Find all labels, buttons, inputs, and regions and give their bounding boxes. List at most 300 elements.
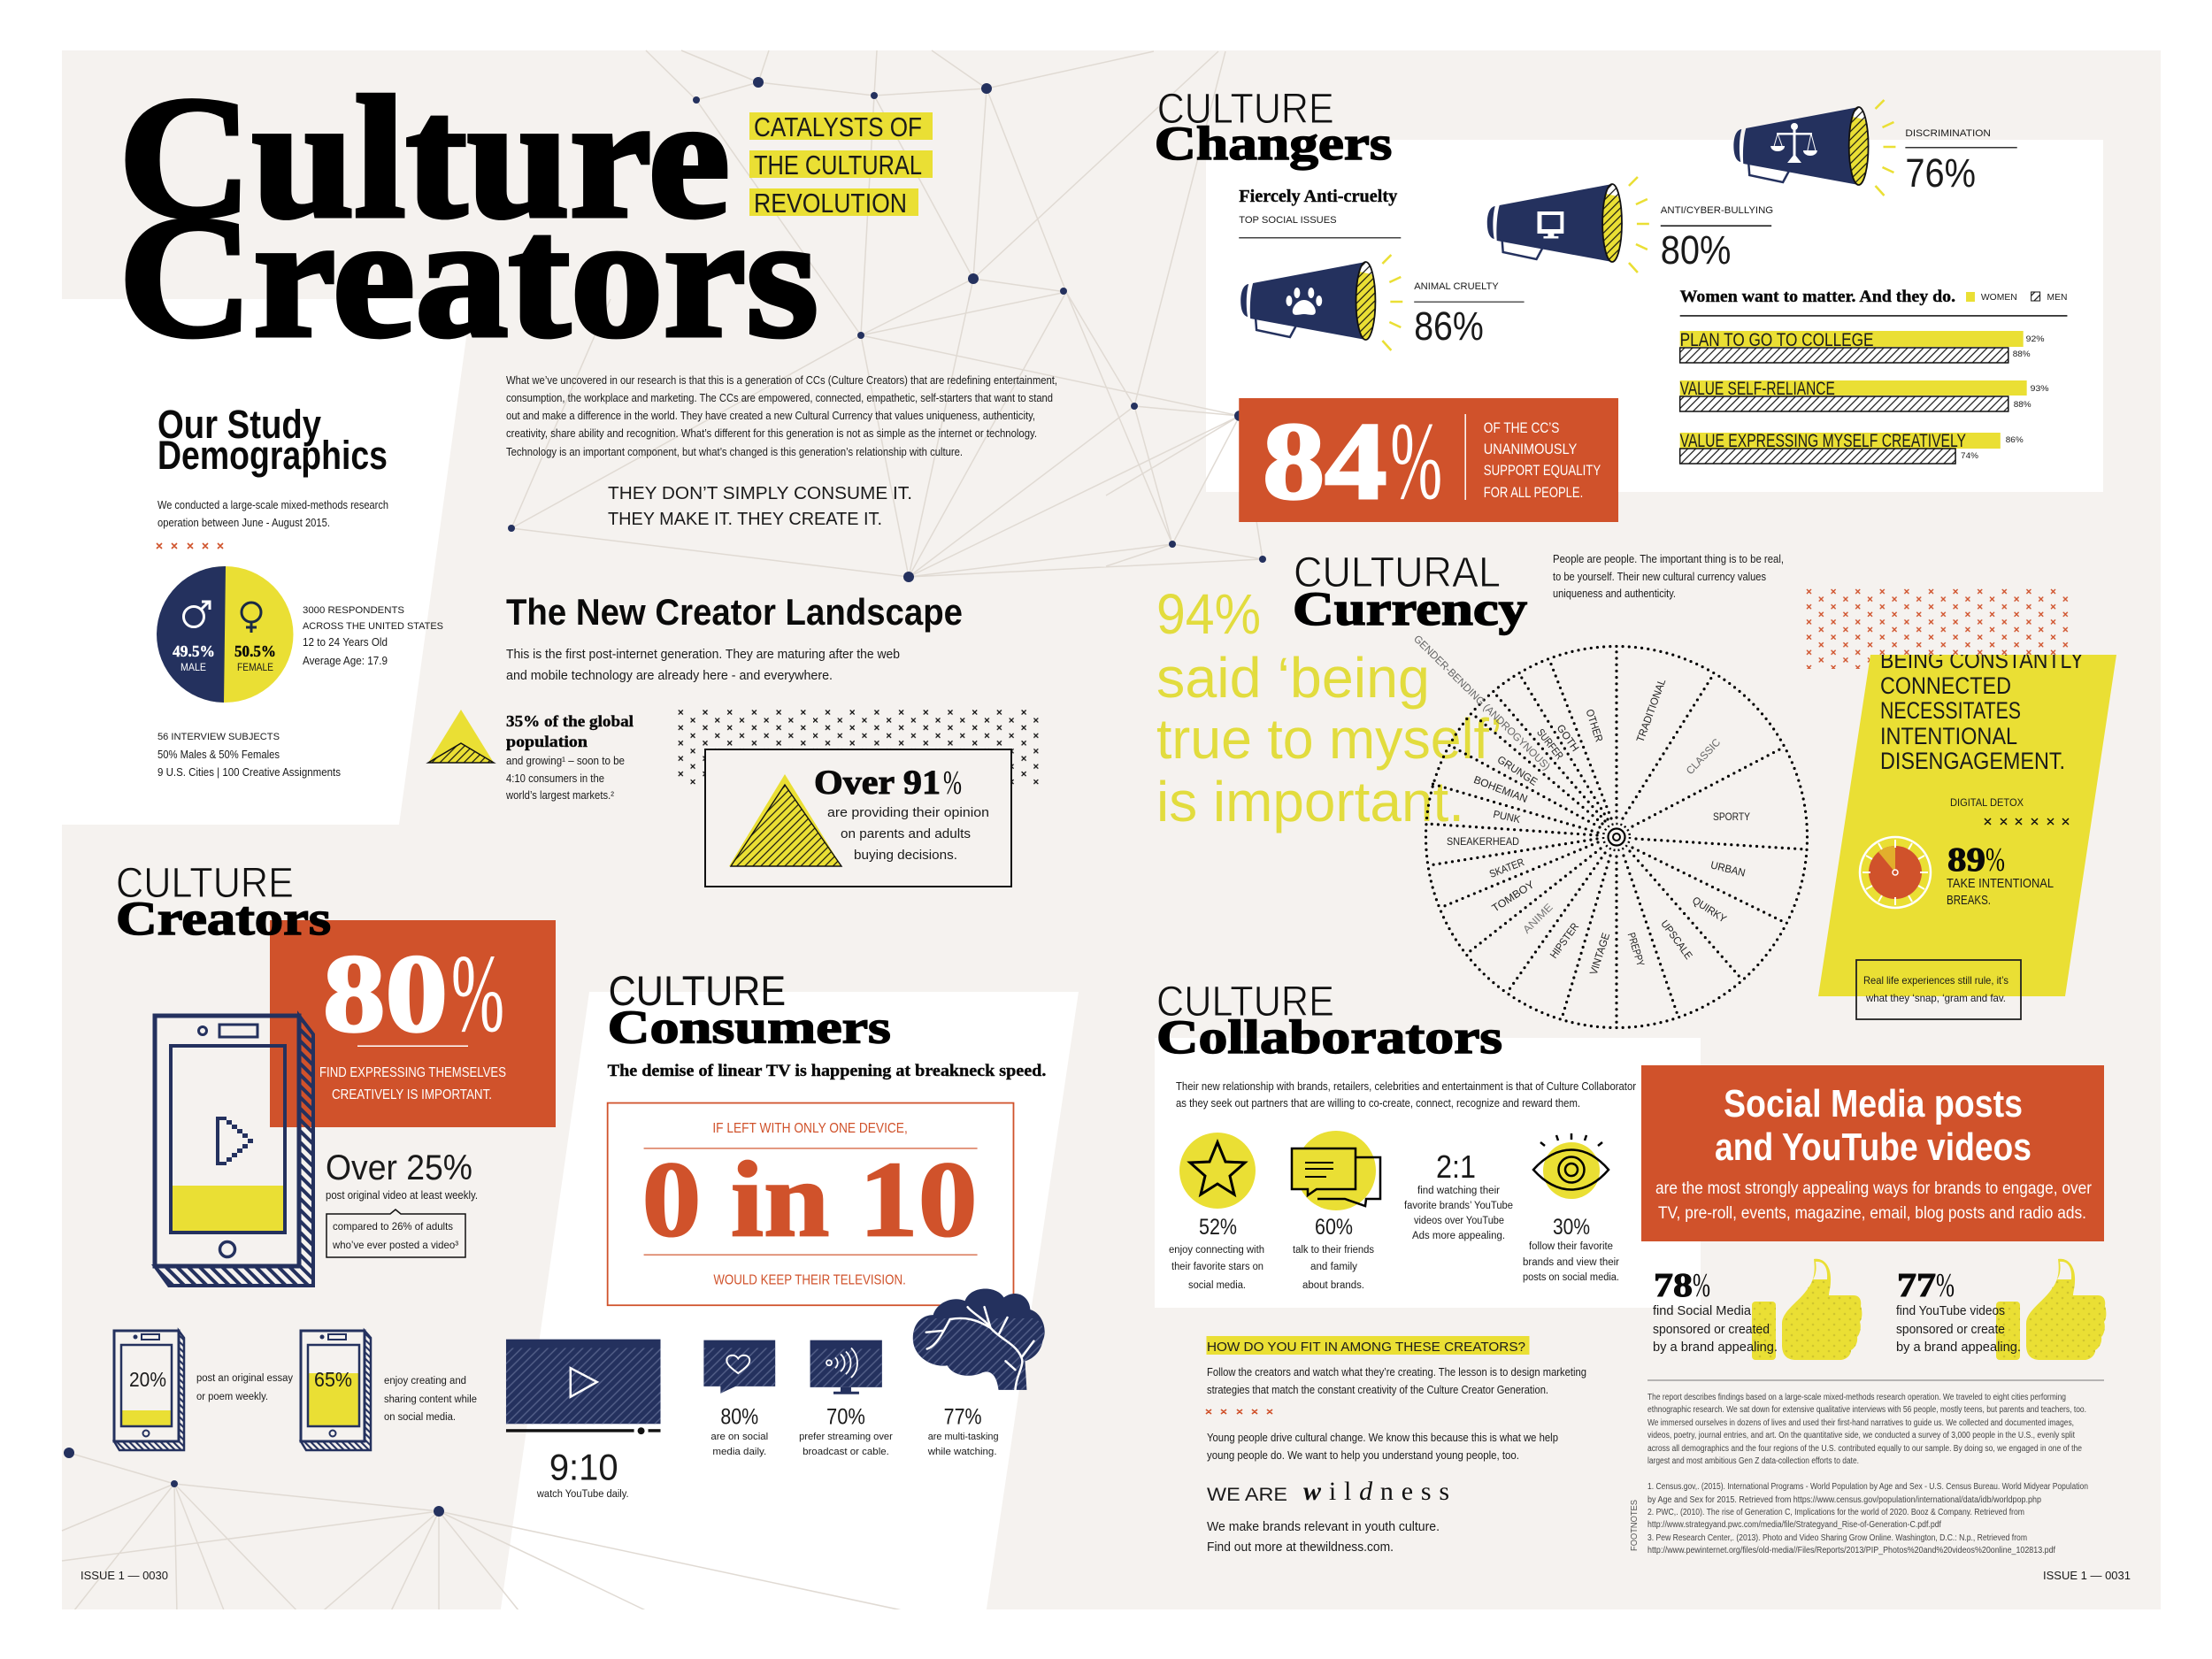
wheel labels xyxy=(1411,633,1750,976)
report description: largest and most ambitious Gen Z data-collection efforts to date. xyxy=(1647,1456,1859,1466)
text: post an original essay: or poem weekly. xyxy=(196,1392,268,1402)
wheel labels: CLASSIC xyxy=(1684,736,1723,777)
stat: 77 percent multitasking xyxy=(927,1405,999,1457)
icon: thumbs up 77 percent xyxy=(1996,1259,2106,1360)
text: follow the creators xyxy=(1207,1366,1586,1396)
wheel labels: TRADITIONAL xyxy=(1634,677,1669,744)
footnotes: 3. Pew Research Center,. (2013). Photo and Video Sharing Grow Online. Washington, D.C.: N.p., Retrieved from xyxy=(1647,1533,2027,1543)
text: post an original essay xyxy=(196,1373,293,1402)
stat: 35 percent global population: 4:10 consumers in the xyxy=(506,772,604,785)
pie chart: gender split: 50.5% xyxy=(234,642,276,660)
intro paragraph: creativity, share ability and recognition. What’s different for this generation is not as simple as the internet or technology. xyxy=(506,426,1037,440)
callout: 84 percent: UNANIMOUSLY xyxy=(1484,441,1577,457)
callout: social media posts: Social Media posts xyxy=(1724,1082,2023,1125)
demographics description xyxy=(157,498,388,529)
chart: style wheel xyxy=(1411,633,1807,1028)
callout: 80 percent: FIND EXPRESSING THEMSELVES xyxy=(319,1065,506,1080)
bars: value expressing myself creatively: 74% xyxy=(1961,451,1979,461)
callout: over 91 percent: Over 91 xyxy=(814,764,941,802)
panel: culture changers white xyxy=(1206,140,2103,492)
report description: ethnographic research. We sat down for extensive qualitative interviews with 56 people, mostly teens, but parents and teachers, too. xyxy=(1647,1405,2086,1415)
icon: small phone 20 percent: 20% xyxy=(129,1368,166,1391)
landscape description xyxy=(506,647,900,683)
stat: discrimination 76 percent: DISCRIMINATION xyxy=(1905,128,1991,139)
callout: over 91 percent: on parents and adults xyxy=(841,826,971,841)
black x marks xyxy=(1985,818,2069,825)
stat: anti cyber bullying 80 percent: 80% xyxy=(1661,227,1731,273)
stat: 60 percent xyxy=(1293,1215,1374,1291)
folio left: ISSUE 1 — 0030 xyxy=(81,1569,168,1582)
wheel labels: PREPPY xyxy=(1625,931,1647,968)
stat: 89 percent: TAKE INTENTIONAL xyxy=(1947,876,2054,891)
title: Creators xyxy=(119,180,818,373)
callout: 0 in 10: IF LEFT WITH ONLY ONE DEVICE, xyxy=(712,1121,908,1136)
bars: plan to go to college xyxy=(1680,330,2045,363)
stat: 77 percent multitasking: 77% xyxy=(944,1405,982,1429)
tagline: THEY DON’T SIMPLY CONSUME IT. xyxy=(608,484,912,503)
stat: 60 percent: 60% xyxy=(1315,1215,1353,1240)
wheel labels: TOMBOY xyxy=(1490,878,1536,915)
interview facts: 50% Males & 50% Females xyxy=(157,748,280,761)
stat: anti cyber bullying 80 percent: ANTI/CYBER-BULLYING xyxy=(1661,205,1773,216)
stat: 78 percent: find Social Media xyxy=(1653,1303,1752,1318)
footnotes: 1. Census.gov,. (2015). International Programs - World Population by Age and Sex - U.S. Census Bureau. World Midyear Population xyxy=(1647,1482,2088,1492)
statement: 94 percent being true: true to myself’ xyxy=(1156,707,1502,771)
callout: compared to adults xyxy=(326,1210,465,1257)
stat: 30 percent: brands and view their xyxy=(1523,1257,1619,1268)
wheel labels: OTHER xyxy=(1583,708,1606,744)
wheel labels: SNEAKERHEAD xyxy=(1447,835,1519,848)
wheel labels: SPORTY xyxy=(1713,810,1750,823)
stat: 77 percent multitasking: while watching. xyxy=(927,1447,997,1457)
network graphic: bottom xyxy=(62,1448,923,1615)
stat: 9:10 xyxy=(536,1447,629,1500)
statement: being constantly connected xyxy=(1881,655,2081,770)
callout: compared to adults: compared to 26% of adults xyxy=(333,1220,453,1233)
stat: 35 percent global population: world’s largest markets.² xyxy=(505,789,614,802)
callout: 80 percent: 80 xyxy=(323,933,448,1056)
stat: 35 percent global population: 35% of the global xyxy=(506,712,634,730)
stat: 9:10: watch YouTube daily. xyxy=(536,1487,629,1500)
title xyxy=(119,60,818,373)
pie chart: gender split: MALE xyxy=(180,661,206,673)
icon: thumbs up 78 percent xyxy=(1752,1259,1862,1360)
pie chart: gender split xyxy=(157,566,294,703)
icon: video player xyxy=(506,1340,661,1434)
subtitle: catalysts: REVOLUTION xyxy=(754,188,907,219)
icon: megaphone animal cruelty xyxy=(1240,255,1402,350)
panel: culture creators section xyxy=(81,860,556,1582)
currency description: to be yourself. Their new cultural currency values xyxy=(1553,570,1766,583)
bars: plan to go to college: 88% xyxy=(2013,349,2031,359)
demographics description: We conducted a large-scale mixed-methods research xyxy=(157,498,388,511)
panel: culture consumers xyxy=(506,968,1046,1500)
respondent facts: ACROSS THE UNITED STATES xyxy=(303,621,443,632)
interview facts: 9 U.S. Cities | 100 Creative Assignments xyxy=(157,765,341,779)
heading: culture consumers: CULTURE xyxy=(609,968,786,1015)
stat: 30 percent: 30% xyxy=(1553,1215,1590,1240)
statement: 94 percent being true: is important. xyxy=(1156,770,1464,833)
heading: our study demographics: Our Study xyxy=(157,402,321,447)
intro paragraph: consumption, the workplace and marketing. The CCs are empowered, connected, empathetic, self-starters that want to stand xyxy=(506,391,1053,404)
icon: eye xyxy=(1533,1133,1609,1199)
statement: 94 percent being true: 94% xyxy=(1156,582,1261,646)
report description xyxy=(1647,1393,2086,1466)
text: young people: Young people drive cultural change. We know this because this is what we help xyxy=(1207,1432,1558,1444)
intro paragraph: out and make a difference in the world. They have created a new Cultural Currency that values uniqueness, authenticity, xyxy=(506,409,1035,422)
callout: 84 percent: % xyxy=(1390,400,1442,522)
stat: 80 percent social: media daily. xyxy=(712,1447,766,1457)
stat: 70 percent streaming: prefer streaming over xyxy=(799,1432,893,1442)
bottom page margin xyxy=(0,1609,2212,1659)
text: follow the creators: Follow the creators and watch what they’re creating. The lesson is to design marketing xyxy=(1207,1366,1586,1379)
icon: megaphone cyber-bullying xyxy=(1487,177,1649,273)
icon: small phone 20 percent xyxy=(114,1331,184,1450)
heading: culture changers xyxy=(1155,86,1392,170)
callout: real life experiences: what they ‘snap, ‘gram and fav. xyxy=(1865,992,2006,1004)
stat: 89 percent: BREAKS. xyxy=(1947,893,1991,908)
heading: culture changers: Changers xyxy=(1155,117,1392,170)
heading: cultural currency: Currency xyxy=(1293,582,1527,635)
bars: value self-reliance: 93% xyxy=(2031,384,2049,394)
callout: over 91 percent xyxy=(705,749,1011,887)
pie chart: gender split: 49.5% xyxy=(173,642,215,660)
panel: demographics white xyxy=(62,299,472,825)
interview facts xyxy=(157,732,341,779)
stat: 2 to 1: 2:1 xyxy=(1436,1148,1476,1185)
callout: 84 percent: OF THE CC’S xyxy=(1484,419,1559,436)
collaborators description: Their new relationship with brands, retailers, celebrities and entertainment is that of Culture Collaborator xyxy=(1176,1079,1637,1093)
red x marks xyxy=(157,543,223,549)
stat: 70 percent streaming: 70% xyxy=(826,1405,865,1429)
stat: 52 percent xyxy=(1169,1215,1264,1291)
icon: small triangle xyxy=(428,710,494,763)
currency description: People are people. The important thing is to be real, xyxy=(1553,552,1784,565)
heading: culture collaborators: Collaborators xyxy=(1156,1010,1502,1064)
logo: we are wildness: w il d ness xyxy=(1303,1477,1449,1506)
wheel labels: QUIRKY xyxy=(1690,894,1729,926)
heading: our study demographics: Demographics xyxy=(157,433,388,478)
pie chart: gender split: FEMALE xyxy=(237,661,273,673)
stat: over 25 percent: post original video at least weekly. xyxy=(326,1189,478,1202)
respondent facts: 12 to 24 Years Old xyxy=(303,635,388,649)
stat: anti cyber bullying 80 percent xyxy=(1661,205,1773,273)
panel: cultural currency xyxy=(1156,549,2116,1028)
folio right: ISSUE 1 — 0031 xyxy=(2043,1569,2131,1582)
text: young people: young people do. We want to help you understand young people, too. xyxy=(1207,1449,1519,1462)
stat: 78 percent: sponsored or created xyxy=(1653,1322,1770,1337)
currency description xyxy=(1553,552,1784,600)
stat: 2 to 1: videos over YouTube xyxy=(1414,1216,1504,1226)
footnotes: by Age and Sex for 2015. Retrieved from https://www.census.gov/population/international/data/idb/worldpop.php xyxy=(1647,1495,2041,1505)
tagline: THEY MAKE IT. THEY CREATE IT. xyxy=(608,510,882,529)
landscape description: and mobile technology are already here - and everywhere. xyxy=(506,668,833,683)
bar chart: women want to matter: Women want to matter. And they do. xyxy=(1680,288,1955,306)
x pattern xyxy=(678,710,1041,786)
landscape description: This is the first post-internet generation. They are maturing after the web xyxy=(506,647,900,662)
callout: 80 percent: CREATIVELY IS IMPORTANT. xyxy=(332,1087,492,1102)
logo: we are wildness xyxy=(1207,1477,1449,1506)
statement: being constantly connected: DISENGAGEMENT. xyxy=(1880,748,2065,774)
callout: social media posts xyxy=(1641,1065,2104,1241)
callout: 0 in 10: WOULD KEEP THEIR TELEVISION. xyxy=(713,1273,906,1288)
subtitle: catalysts: THE CULTURAL xyxy=(754,150,922,180)
heading: culture collaborators xyxy=(1156,979,1502,1064)
footnotes xyxy=(1647,1482,2088,1555)
stat: 60 percent: talk to their friends xyxy=(1293,1245,1374,1256)
wheel labels: URBAN xyxy=(1709,858,1747,879)
statement: being constantly connected: BEING CONSTANTLY xyxy=(1880,647,2084,673)
stat: 77 percent: sponsored or create xyxy=(1896,1322,2005,1337)
wheel labels: GENDER-BENDING (ANDROGYNOUS) xyxy=(1411,633,1553,772)
demographics description: operation between June - August 2015. xyxy=(157,516,330,529)
callout: 84 percent xyxy=(1239,398,1618,522)
icon: female symbol xyxy=(242,603,261,633)
stat: 60 percent: and family xyxy=(1310,1262,1357,1272)
icon: tv streaming xyxy=(810,1340,882,1394)
heading: culture consumers xyxy=(608,968,891,1053)
text: we make brands relevant: We make brands relevant in youth culture. xyxy=(1207,1519,1440,1534)
network graphic: top xyxy=(508,50,1266,582)
text: young people xyxy=(1207,1432,1558,1462)
stat: 52 percent: their favorite stars on xyxy=(1171,1262,1263,1272)
stat: 78 percent xyxy=(1653,1267,1778,1355)
respondent facts: 3000 RESPONDENTS xyxy=(303,605,404,616)
statement: 94 percent being true: said ‘being xyxy=(1156,646,1430,710)
sub-heading: fiercely anti-cruelty: TOP SOCIAL ISSUES xyxy=(1239,215,1337,226)
icon: speech bubble heart xyxy=(703,1340,775,1394)
text: we make brands relevant xyxy=(1207,1519,1440,1555)
stat: animal cruelty 86 percent: ANIMAL CRUELTY xyxy=(1414,281,1499,292)
stat: 35 percent global population: and growing¹ – soon to be xyxy=(506,755,625,767)
statement: 94 percent being true xyxy=(1156,582,1502,833)
stat: 2 to 1: Ads more appealing. xyxy=(1412,1231,1505,1241)
legend: WOMEN xyxy=(1981,293,2017,303)
stat: 35 percent global population xyxy=(505,712,634,802)
heading: culture creators: Creators xyxy=(116,892,331,945)
wheel labels: SURFER xyxy=(1534,726,1566,762)
intro paragraph xyxy=(506,373,1057,458)
stat: 77 percent: % xyxy=(1936,1267,1955,1304)
bars: value expressing myself creatively: 86% xyxy=(2006,435,2024,445)
footnotes: http://www.strategyand.pwc.com/media/file/Strategyand_Rise-of-Generation-C.pdf.pdf xyxy=(1647,1520,1941,1530)
tagline xyxy=(608,484,912,529)
report description: We immersed ourselves in dozens of lives and used their first-hand narratives to guide us. We collected and documented images, xyxy=(1647,1418,2074,1428)
stat: 89 percent: % xyxy=(1985,841,2005,879)
icon: large phone xyxy=(155,1016,313,1286)
callout: social media posts: TV, pre-roll, events, magazine, email, blog posts and radio ads. xyxy=(1658,1204,2086,1223)
subtitle: catalysts xyxy=(749,111,933,219)
stat: 77 percent: 77 xyxy=(1897,1267,1936,1304)
subtitle: catalysts: CATALYSTS OF xyxy=(754,111,922,142)
stat: 77 percent xyxy=(1896,1267,2021,1355)
wheel labels: PUNK xyxy=(1492,808,1522,826)
icon: pixel play xyxy=(216,1117,253,1165)
stat: 30 percent xyxy=(1523,1215,1619,1283)
icon: hatched triangle xyxy=(729,774,841,866)
heading: new creator landscape: The New Creator Landscape xyxy=(506,591,963,633)
icon: scales xyxy=(1770,123,1817,163)
legend: MEN xyxy=(2047,293,2067,303)
stat: animal cruelty 86 percent xyxy=(1414,281,1525,349)
wheel labels: GRUNGE xyxy=(1495,753,1540,788)
bars: plan to go to college: PLAN TO GO TO COLLEGE xyxy=(1680,330,1874,350)
icon: small phone 65 percent: 65% xyxy=(314,1368,352,1391)
footnotes label: FOOTNOTES xyxy=(1629,1500,1640,1551)
bars: value expressing myself creatively xyxy=(1680,431,2024,464)
panel: new creator landscape xyxy=(428,591,1041,887)
panel: culture consumers white xyxy=(500,992,1079,1615)
stat: discrimination 76 percent: 76% xyxy=(1905,150,1976,196)
stat: 78 percent: % xyxy=(1693,1267,1710,1304)
stat: 77 percent: by a brand appealing. xyxy=(1896,1340,2021,1355)
heading: culture creators: CULTURE xyxy=(116,860,294,907)
stat: 70 percent streaming: broadcast or cable. xyxy=(803,1447,889,1457)
text: enjoy creating: sharing content while xyxy=(384,1394,477,1405)
callout: 80 percent: % xyxy=(451,933,504,1056)
stat: 89 percent: 89 xyxy=(1947,841,1985,879)
callout: 84 percent: FOR ALL PEOPLE. xyxy=(1484,484,1583,501)
stat: 77 percent multitasking: are multi-tasking xyxy=(928,1432,999,1442)
callout: 0 in 10 xyxy=(608,1103,1013,1305)
footnotes: http://www.pewinternet.org/files/old-media//Files/Reports/2013/PIP_Photos%20and%20videos%20online_102813.pdf xyxy=(1647,1546,2055,1555)
panel: study demographics xyxy=(157,402,443,779)
statement: being constantly connected: INTENTIONAL xyxy=(1880,723,2017,749)
wheel labels: SKATER xyxy=(1487,856,1526,880)
report description: videos, poetry, journal entries, and art. On the quantitative side, we conducted a survey of 3,000 people in the U.S., evenly split xyxy=(1647,1431,2075,1440)
heading: cultural currency: CULTURAL xyxy=(1294,549,1501,596)
sub-heading: demise of linear tv: The demise of linear TV is happening at breakneck speed. xyxy=(608,1062,1046,1080)
callout: 84 percent: 84 xyxy=(1263,400,1386,522)
collaborators description xyxy=(1176,1079,1637,1110)
text: enjoy creating: on social media. xyxy=(384,1412,456,1423)
heading: culture collaborators: CULTURE xyxy=(1156,979,1334,1025)
text: enjoy creating xyxy=(384,1376,477,1423)
heading: culture creators xyxy=(116,860,331,945)
footnotes: 2. PWC,. (2010). The rise of Generation C, Implications for the world of 2020. Booz & Company. Retrieved from xyxy=(1647,1508,2024,1517)
wheel labels: UPSCALE xyxy=(1658,918,1695,962)
callout: 0 in 10: 0 in 10 xyxy=(642,1139,978,1259)
text: post an original essay: post an original essay xyxy=(196,1373,293,1384)
heading: our study demographics xyxy=(157,402,388,478)
bars: value self-reliance xyxy=(1680,379,2049,411)
title: Culture xyxy=(119,60,730,254)
wheel labels: GOTH xyxy=(1555,722,1581,754)
stat: 9:10: 9:10 xyxy=(549,1447,618,1487)
icon: megaphone discrimination xyxy=(1733,100,1895,196)
statement: being constantly connected: CONNECTED xyxy=(1880,672,2011,699)
sub-heading: fiercely anti-cruelty: Fiercely Anti-cruelty xyxy=(1239,187,1397,206)
stat: 60 percent: about brands. xyxy=(1302,1280,1364,1291)
wheel labels: ANIME xyxy=(1520,901,1555,936)
panel: culture changers xyxy=(1155,86,2067,522)
sub-heading: fiercely anti-cruelty xyxy=(1239,187,1401,239)
stat: 52 percent: enjoy connecting with xyxy=(1169,1245,1264,1256)
callout: real life experiences: Real life experiences still rule, it’s xyxy=(1863,974,2008,987)
bars: value self-reliance: 88% xyxy=(2014,400,2032,410)
stat: 80 percent social: are on social xyxy=(710,1432,768,1442)
heading: cultural currency xyxy=(1293,549,1527,635)
stat: over 25 percent: Over 25% xyxy=(326,1148,472,1187)
stat: 78 percent: by a brand appealing. xyxy=(1653,1340,1778,1355)
icon: brain xyxy=(913,1288,1045,1390)
stat: 78 percent: 78 xyxy=(1654,1267,1693,1304)
icon: monitor xyxy=(1538,211,1563,239)
stat: 70 percent streaming xyxy=(799,1405,893,1457)
logo: we are wildness: WE ARE xyxy=(1207,1485,1287,1505)
callout: compared to adults: who’ve ever posted a video³ xyxy=(332,1239,458,1251)
intro paragraph: Technology is an important component, but what’s changed is this generation’s relationship with culture. xyxy=(506,445,963,458)
callout: social media posts: are the most strongly appealing ways for brands to engage, over xyxy=(1655,1179,2093,1198)
icon: paw xyxy=(1286,288,1322,315)
icon: chat bubbles xyxy=(1292,1131,1380,1210)
panel: culture collaborators xyxy=(1156,979,2131,1582)
bars: value self-reliance: VALUE SELF-RELIANCE xyxy=(1680,379,1835,399)
report description: The report describes findings based on a large-scale mixed-methods research operation. We traveled to eight cities performing xyxy=(1647,1393,2066,1402)
stat: animal cruelty 86 percent: 86% xyxy=(1414,303,1484,349)
stat: 77 percent: find YouTube videos xyxy=(1896,1303,2005,1318)
stat: 30 percent: posts on social media. xyxy=(1523,1272,1619,1283)
report description: across all demographics and the four regions of the U.S. contributed equally to our sample. By doing so, we engaged in one of the xyxy=(1647,1444,2082,1454)
stat: 2 to 1: find watching their xyxy=(1417,1186,1500,1196)
callout: over 91 percent: % xyxy=(943,764,962,802)
stat: 35 percent global population: population xyxy=(506,733,588,750)
callout: real life experiences xyxy=(1856,960,2021,1019)
text: enjoy creating: enjoy creating and xyxy=(384,1376,466,1386)
red x pattern xyxy=(1805,588,2070,669)
callout: over 91 percent: are providing their opinion xyxy=(827,805,989,820)
bar chart: women want to matter xyxy=(1680,288,2067,464)
text: we make brands relevant: Find out more at thewildness.com. xyxy=(1207,1540,1394,1555)
heading: how do you fit in: HOW DO YOU FIT IN AMONG THESE CREATORS? xyxy=(1207,1340,1525,1355)
icon: clock xyxy=(1860,837,1931,908)
stat: 2 to 1: favorite brands’ YouTube xyxy=(1404,1201,1513,1211)
icon: male symbol xyxy=(184,602,210,626)
stat: 80 percent social xyxy=(710,1405,768,1457)
callout: 84 percent: SUPPORT EQUALITY xyxy=(1484,462,1601,479)
text: follow the creators: strategies that match the constant creativity of the Culture Creator Generation. xyxy=(1207,1384,1548,1396)
wheel labels: BOHEMIAN xyxy=(1472,773,1529,805)
stat: discrimination 76 percent xyxy=(1905,128,2017,196)
heading: culture changers: CULTURE xyxy=(1157,86,1334,133)
callout: social media posts: and YouTube videos xyxy=(1715,1125,2032,1169)
collaborators description: as they seek out partners that are willing to co-create, connect, recognize and reward them. xyxy=(1176,1096,1580,1110)
legend xyxy=(1966,292,2067,303)
wheel labels: VINTAGE xyxy=(1587,932,1612,976)
intro paragraph: What we’ve uncovered in our research is that this is a generation of CCs (Culture Creators) that are redefining entertainment, xyxy=(506,373,1057,387)
icon: star xyxy=(1179,1133,1256,1209)
stat: 52 percent: 52% xyxy=(1199,1215,1237,1240)
panel: digital detox: DIGITAL DETOX xyxy=(1950,796,2024,809)
respondent facts xyxy=(303,605,443,667)
respondent facts: Average Age: 17.9 xyxy=(303,654,388,667)
panel: culture collaborators white xyxy=(1155,1038,1701,1308)
wheel labels: HIPSTER xyxy=(1548,920,1581,961)
bars: plan to go to college: 92% xyxy=(2026,334,2045,344)
stat: 52 percent: social media. xyxy=(1188,1280,1246,1291)
stat: 2 to 1 xyxy=(1404,1148,1513,1241)
callout: 80 percent xyxy=(270,920,556,1127)
callout: over 91 percent: buying decisions. xyxy=(854,848,957,863)
bars: value expressing myself creatively: VALUE EXPRESSING MYSELF CREATIVELY xyxy=(1680,431,1966,451)
stat: 80 percent social: 80% xyxy=(720,1405,758,1429)
interview facts: 56 INTERVIEW SUBJECTS xyxy=(157,732,280,742)
red x marks xyxy=(1206,1409,1272,1414)
heading: culture consumers: Consumers xyxy=(608,1001,891,1053)
statement: being constantly connected: NECESSITATES xyxy=(1880,697,2021,724)
currency description: uniqueness and authenticity. xyxy=(1553,587,1676,600)
icon: small phone 65 percent xyxy=(301,1331,371,1450)
